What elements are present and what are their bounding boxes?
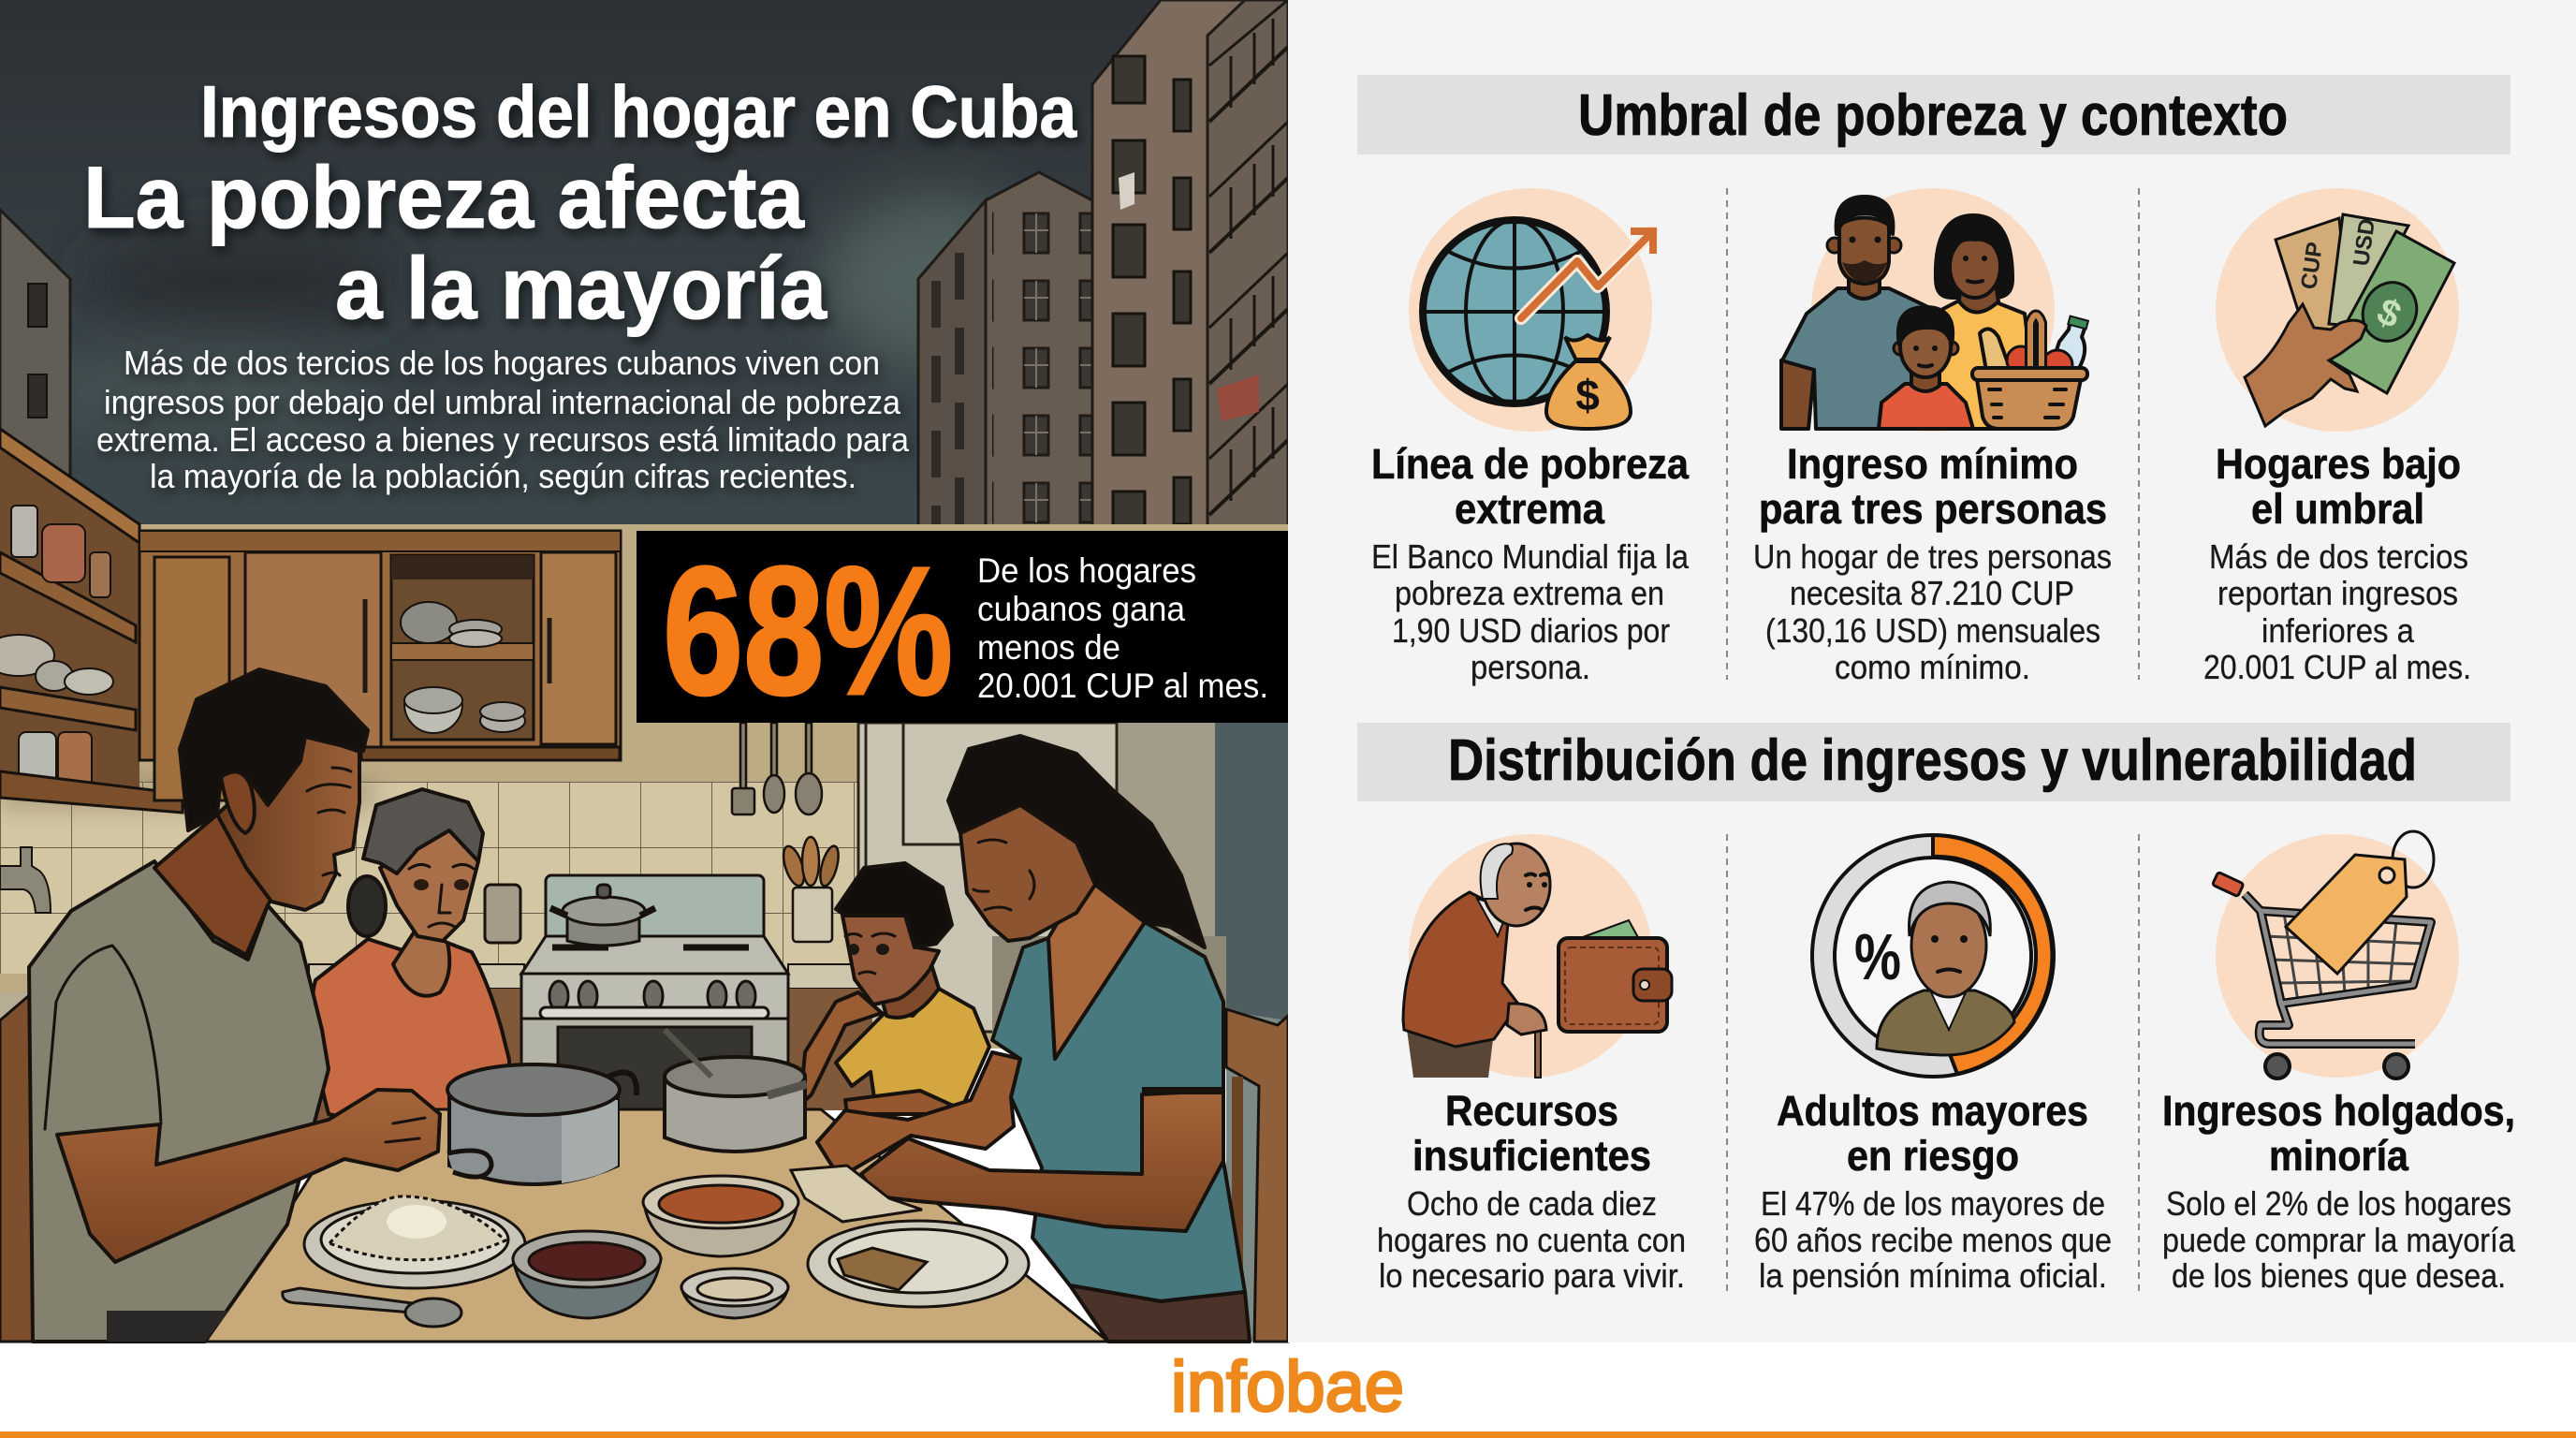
icon: globe with arrow and money bag: $ — [1575, 371, 1600, 419]
icon: hand holding bills: CUP — [2296, 241, 2328, 291]
card body — [1754, 1184, 2112, 1295]
pot left — [447, 1064, 637, 1184]
card title: Adultos mayores — [1777, 1087, 2088, 1135]
card body: persona. — [1471, 648, 1590, 686]
buildings — [0, 0, 1288, 562]
title: three lines: La pobreza afecta — [83, 148, 805, 246]
callout text — [977, 551, 1268, 705]
kitchen wall and tiles — [0, 524, 1288, 1049]
orange bean bowl — [643, 1176, 798, 1256]
card: Recursos insuficientes — [1377, 834, 1686, 1295]
upper cabinets — [139, 531, 621, 800]
icon: donut chart 47% with elder — [1812, 835, 2054, 1077]
spoon — [283, 1288, 461, 1327]
bean bowl — [513, 1231, 661, 1318]
section: Distribución de ingresos y vulnerabilidad — [1357, 723, 2516, 1295]
icon: donut chart 47% with elder: % — [1854, 920, 1901, 993]
card body — [1371, 537, 1690, 686]
intro text block: la mayoría de la población, según cifras recientes. — [150, 457, 856, 495]
intro text block: ingresos por debajo del umbral internacional de pobreza — [104, 383, 901, 421]
big number: 68% — [663, 529, 953, 733]
card body: 1,90 USD diarios por — [1392, 611, 1670, 650]
title: three lines: a la mayoría — [335, 239, 827, 337]
card body — [1377, 1184, 1686, 1295]
panel: kitchen illustration — [0, 0, 1288, 1342]
icon: hand holding bills — [2216, 188, 2459, 432]
card title: insuficientes — [1412, 1132, 1651, 1180]
card: Adultos mayores en riesgo — [1754, 835, 2112, 1295]
intro text block: Más de dos tercios de los hogares cubanos viven con — [124, 344, 880, 382]
card title: Hogares bajo — [2216, 440, 2461, 488]
card title: Recursos — [1445, 1087, 1618, 1135]
card title: el umbral — [2251, 485, 2424, 533]
woman — [817, 736, 1250, 1342]
card title: minoría — [2269, 1132, 2409, 1180]
card body: 60 años recibe menos que — [1754, 1221, 2112, 1259]
icon: hand holding bills: USD — [2349, 217, 2380, 268]
grandmother — [312, 789, 510, 1128]
card body: lo necesario para vivir. — [1379, 1256, 1685, 1295]
man — [29, 669, 440, 1342]
card title — [1759, 440, 2107, 533]
icon: family with basket — [1781, 188, 2088, 432]
card title: Línea de pobreza — [1371, 440, 1690, 488]
card title — [1777, 1087, 2088, 1180]
section heading: Distribución de ingresos y vulnerabilidad — [1448, 728, 2417, 793]
card: Ingresos holgados, minoría — [2162, 831, 2516, 1295]
card body: Ocho de cada diez — [1407, 1184, 1657, 1223]
right plate — [808, 1221, 1029, 1307]
card title: extrema — [1455, 485, 1605, 533]
pot handle — [447, 1151, 491, 1177]
card body: como mínimo. — [1835, 648, 2030, 686]
child — [800, 863, 989, 1114]
card body: la pensión mínima oficial. — [1759, 1256, 2107, 1295]
pot right — [665, 1030, 807, 1152]
card title: Ingresos holgados, — [2162, 1087, 2515, 1135]
faucet — [0, 847, 51, 913]
section heading: Umbral de pobreza y contexto — [1578, 83, 2288, 148]
callout text: cubanos gana — [977, 590, 1185, 628]
card body: Un hogar de tres personas — [1753, 537, 2112, 576]
section: Umbral de pobreza y contexto — [1357, 75, 2510, 686]
card body — [2162, 1184, 2516, 1295]
card title — [2162, 1087, 2515, 1180]
card body: (130,16 USD) mensuales — [1765, 611, 2100, 650]
stove — [521, 875, 788, 1121]
title: three lines: Ingresos del hogar en Cuba — [200, 70, 1077, 153]
counter — [0, 964, 872, 1217]
card body: necesita 87.210 CUP — [1790, 574, 2074, 612]
callout: 68% — [637, 529, 1288, 733]
card body: El 47% de los mayores de — [1761, 1184, 2105, 1223]
icon: globe with arrow and money bag — [1409, 188, 1653, 432]
card body: inferiores a — [2261, 611, 2415, 650]
section heading — [1357, 75, 2510, 154]
card body: puede comprar la mayoría — [2162, 1221, 2516, 1259]
footer orange line — [0, 1431, 2576, 1438]
stove pot — [550, 885, 655, 946]
table — [205, 1109, 1108, 1342]
card body: Más de dos tercios — [2209, 537, 2468, 576]
footer logo: infobae: infobae — [1171, 1347, 1404, 1427]
card body: de los bienes que desea. — [2172, 1256, 2506, 1295]
icon: hand holding bills: $ — [2371, 290, 2408, 336]
card body — [1753, 537, 2112, 686]
card: Hogares bajo el umbral — [2203, 188, 2471, 686]
paper — [791, 1166, 922, 1222]
intro text block: extrema. El acceso a bienes y recursos está limitado para — [96, 420, 910, 459]
chairs — [0, 992, 1288, 1342]
panel: right column background — [1288, 0, 2576, 1343]
card body — [2203, 537, 2471, 686]
rice plate — [304, 1196, 525, 1288]
title: three lines — [83, 70, 1077, 337]
card title — [2216, 440, 2461, 533]
icon: shopping cart with tag — [2212, 831, 2459, 1078]
card body: 20.001 CUP al mes. — [2203, 648, 2471, 686]
icon: elder with wallet — [1403, 834, 1672, 1078]
left shelves — [0, 429, 183, 813]
callout text: De los hogares — [977, 551, 1196, 590]
card title: Ingreso mínimo — [1787, 440, 2078, 488]
card title: para tres personas — [1759, 485, 2107, 533]
hanging utensils — [732, 723, 822, 814]
callout text: 20.001 CUP al mes. — [977, 667, 1268, 705]
card body: hogares no cuenta con — [1377, 1221, 1686, 1259]
card body: El Banco Mundial fija la — [1371, 537, 1690, 576]
card title — [1371, 440, 1690, 533]
card title — [1412, 1087, 1651, 1180]
intro text block — [96, 344, 910, 495]
card body: reportan ingresos — [2217, 574, 2458, 612]
card: Ingreso mínimo para tres personas — [1753, 188, 2112, 686]
canister — [485, 885, 520, 943]
small bowl — [681, 1269, 788, 1318]
utensil jar — [780, 837, 842, 942]
card body: Solo el 2% de los hogares — [2166, 1184, 2511, 1223]
card body: pobreza extrema en — [1395, 574, 1664, 612]
card: Línea de pobreza extrema — [1371, 188, 1690, 686]
callout text: menos de — [977, 628, 1120, 667]
sky — [0, 0, 1288, 580]
card title: en riesgo — [1847, 1132, 2019, 1180]
